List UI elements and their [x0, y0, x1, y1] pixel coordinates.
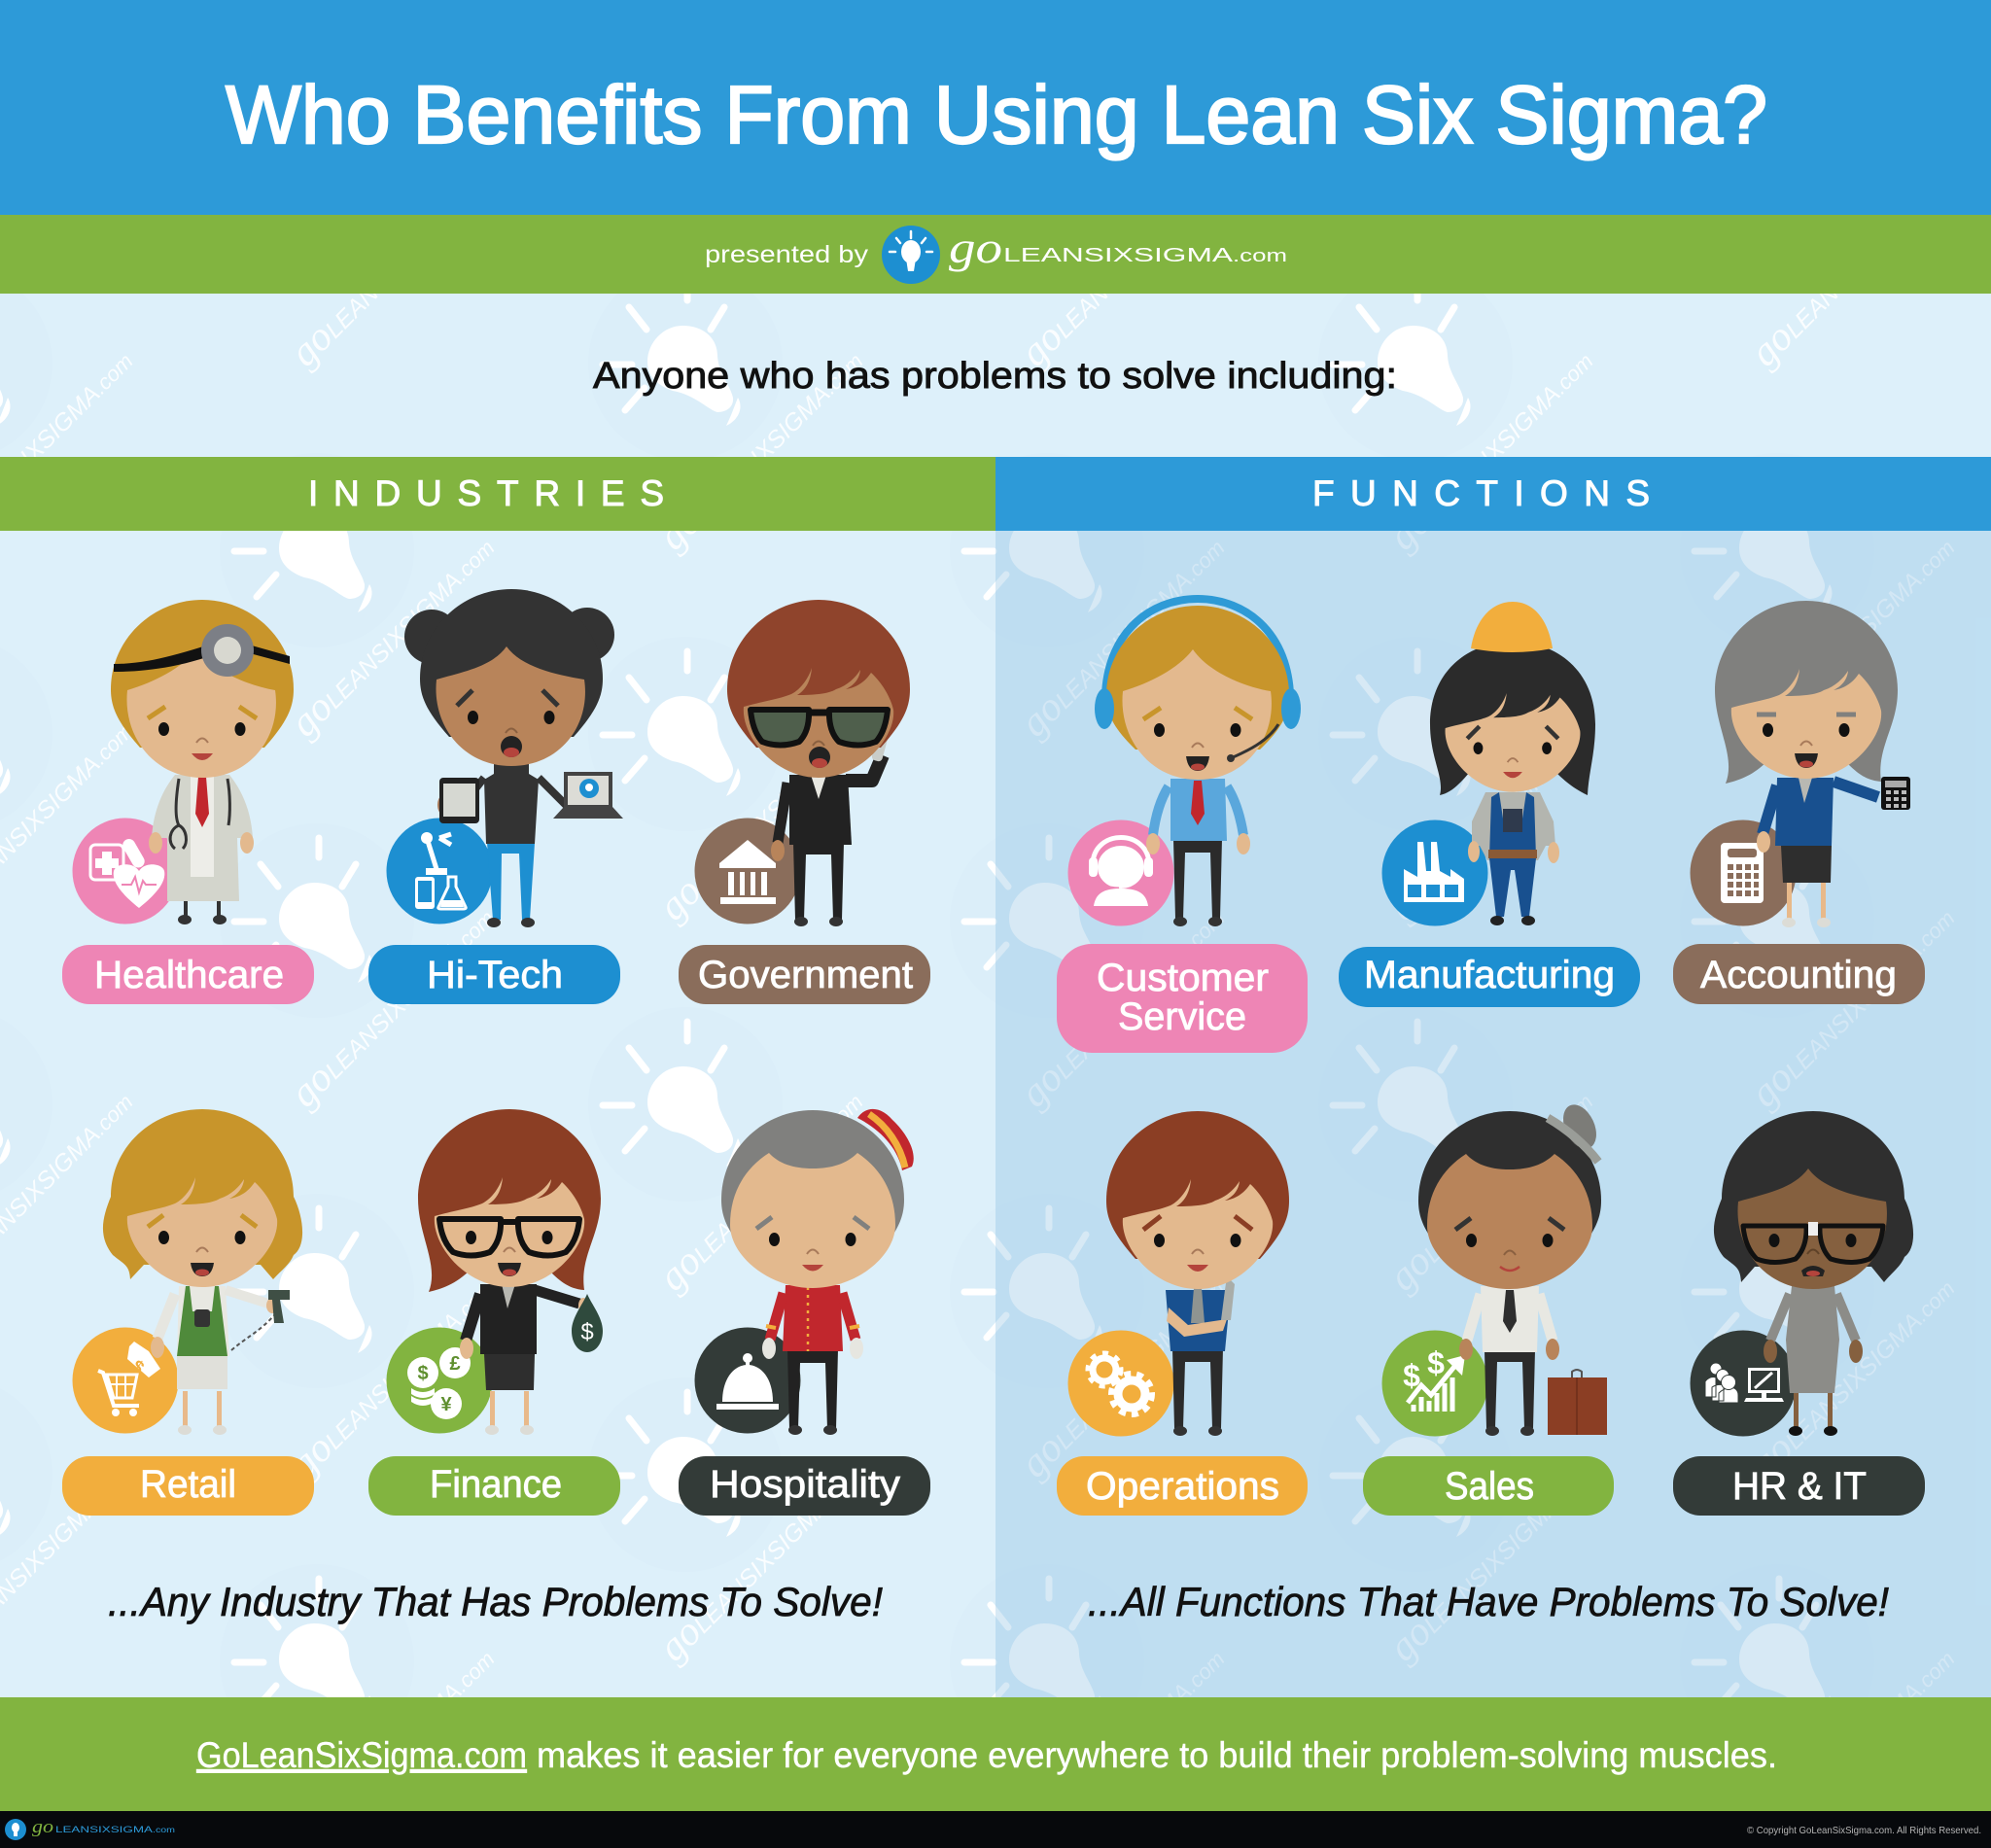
panel: finance [368, 1109, 620, 1516]
small wordmark: .com [153, 1826, 175, 1834]
icon: sales badge [1382, 1330, 1487, 1437]
icon: retail badge: $ [128, 1356, 148, 1377]
panel: operations [1057, 1111, 1308, 1516]
icon: hospitality badge [694, 1328, 801, 1433]
label: accounting [1673, 944, 1925, 1004]
infographic: goLEANSIXSIGMA.com [1742, 154, 1963, 375]
character: finance woman: $ [580, 1319, 594, 1345]
icon: healthcare badge [72, 819, 179, 924]
icon: hi-tech badge [387, 819, 492, 924]
footer band: GoLeanSixSigma.com [196, 1735, 527, 1775]
infographic: goLEANSIXSIGMA.com [650, 1448, 871, 1670]
label: hospitality: Hospitality [710, 1463, 900, 1506]
label: finance: Finance [430, 1463, 562, 1506]
label: finance [368, 1456, 620, 1516]
title: Who Benefits From Using Lean Six Sigma? [226, 69, 1767, 160]
presented by text: presented by [705, 241, 869, 268]
label: operations: Operations [1086, 1465, 1279, 1508]
label: hr and it [1673, 1456, 1925, 1516]
header band with title [0, 0, 1991, 215]
character: hr woman [1714, 1111, 1913, 1436]
character: finance woman [418, 1109, 603, 1435]
banner: industries [0, 457, 996, 531]
panel: manufacturing [1339, 602, 1640, 1007]
character: salesman [1418, 1099, 1607, 1436]
panel: functions background [996, 531, 1991, 1697]
label: accounting: Accounting [1700, 954, 1897, 996]
label: hr and it: HR & IT [1732, 1465, 1867, 1508]
icon: accounting badge [1690, 820, 1797, 925]
panel: government [679, 600, 930, 1004]
label: sales: Sales [1445, 1465, 1534, 1508]
infographic: goLEANSIXSIGMA.com [1012, 894, 1233, 1116]
icon: finance badge [387, 1328, 492, 1433]
banner: functions: FUNCTIONS [1312, 473, 1650, 513]
infographic: goLEANSIXSIGMA.com [282, 154, 503, 375]
subheading: Anyone who has problems to solve including: [593, 356, 1397, 397]
character: operations man [1106, 1111, 1289, 1436]
panel: hospitality [679, 1109, 930, 1516]
infographic: goLEANSIXSIGMA.com [650, 708, 871, 929]
infographic: goLEANSIXSIGMA.com [650, 1078, 871, 1300]
infographic: goLEANSIXSIGMA.com [1012, 1265, 1233, 1486]
label: retail [62, 1456, 314, 1516]
presented by band [0, 215, 1991, 294]
character: manufacturing worker [1430, 602, 1595, 925]
label: healthcare: Healthcare [94, 954, 284, 996]
infographic: goLEANSIXSIGMA.com [1380, 1078, 1601, 1300]
closing line: industries: ...Any Industry That Has Problems To Solve! [108, 1579, 883, 1624]
footer band [0, 1697, 1991, 1811]
label: operations [1057, 1456, 1308, 1516]
copyright bar [0, 1811, 1991, 1848]
panel: healthcare [62, 600, 314, 1004]
infographic: goLEANSIXSIGMA.com [1380, 708, 1601, 929]
icon: finance badge: $ [417, 1363, 429, 1384]
footer band: makes it easier for everyone everywhere to build their problem-solving muscles. [537, 1735, 1777, 1775]
closing line: functions: ...All Functions That Have Problems To Solve! [1088, 1579, 1889, 1624]
label: manufacturing [1339, 947, 1640, 1007]
character: hi-tech woman [404, 589, 623, 927]
panel: sales [1363, 1099, 1614, 1516]
infographic: goLEANSIXSIGMA.com [650, 337, 871, 559]
icon: sales badge: $ [1427, 1345, 1445, 1380]
icon: finance badge: ¥ [440, 1394, 452, 1415]
logo wordmark [949, 223, 1287, 272]
panel: hr and it [1673, 1111, 1925, 1516]
label: hospitality [679, 1456, 930, 1516]
character: customer service agent [1095, 599, 1301, 926]
label: manufacturing: Manufacturing [1364, 954, 1615, 996]
logo wordmark: .com [1233, 246, 1287, 265]
infographic: goLEANSIXSIGMA.com [282, 524, 503, 746]
infographic: goLEANSIXSIGMA.com [282, 1265, 503, 1486]
character: accountant [1715, 601, 1910, 927]
label: hi-tech [368, 945, 620, 1004]
icon: government badge [694, 819, 801, 924]
panel: accounting [1673, 601, 1925, 1004]
infographic: goLEANSIXSIGMA.com [1380, 1448, 1601, 1670]
banner: functions [996, 457, 1991, 531]
icon: operations badge [1067, 1330, 1174, 1437]
label: hi-tech: Hi-Tech [427, 954, 563, 996]
icon: manufacturing badge [1382, 820, 1487, 925]
label: customer service: Customer [1097, 957, 1269, 999]
small wordmark [32, 1817, 175, 1837]
infographic: goLEANSIXSIGMA.com [1012, 154, 1233, 375]
character: doctor [111, 600, 294, 924]
icon: customer service badge [1067, 820, 1174, 925]
infographic: goLEANSIXSIGMA.com [1742, 1265, 1963, 1486]
infographic: goLEANSIXSIGMA.com [1012, 524, 1233, 746]
icon: sales badge: $ [1403, 1358, 1420, 1393]
character: hospitality man [721, 1109, 914, 1435]
infographic: goLEANSIXSIGMA.com [282, 894, 503, 1116]
character: government man [727, 600, 910, 926]
infographic: goLEANSIXSIGMA.com [1380, 337, 1601, 559]
icon: hr and it badge [1690, 1330, 1797, 1437]
icon: retail badge [72, 1328, 179, 1433]
label: government [679, 945, 930, 1004]
logo wordmark: go [949, 223, 1002, 272]
icon: finance badge: £ [449, 1353, 461, 1375]
label: customer service: Service [1118, 995, 1246, 1038]
panel: customer service [1057, 599, 1308, 1053]
small wordmark: LEANSIXSIGMA [55, 1825, 153, 1834]
banner: industries: INDUSTRIES [308, 473, 664, 513]
icon: small logo [5, 1819, 26, 1840]
infographic: goLEANSIXSIGMA.com [1742, 524, 1963, 746]
small wordmark: go [32, 1817, 53, 1837]
character: retail worker [103, 1109, 302, 1435]
label: sales [1363, 1456, 1614, 1516]
panel: retail [62, 1109, 314, 1516]
logo wordmark: LEANSIXSIGMA [1003, 245, 1234, 266]
label: government: Government [698, 954, 913, 996]
label: healthcare [62, 945, 314, 1004]
infographic: goLEANSIXSIGMA.com [1742, 894, 1963, 1116]
panel: hi-tech [368, 589, 623, 1004]
label: retail: Retail [140, 1463, 236, 1506]
icon: logo light bulb [882, 226, 940, 284]
label: customer service [1057, 944, 1308, 1053]
